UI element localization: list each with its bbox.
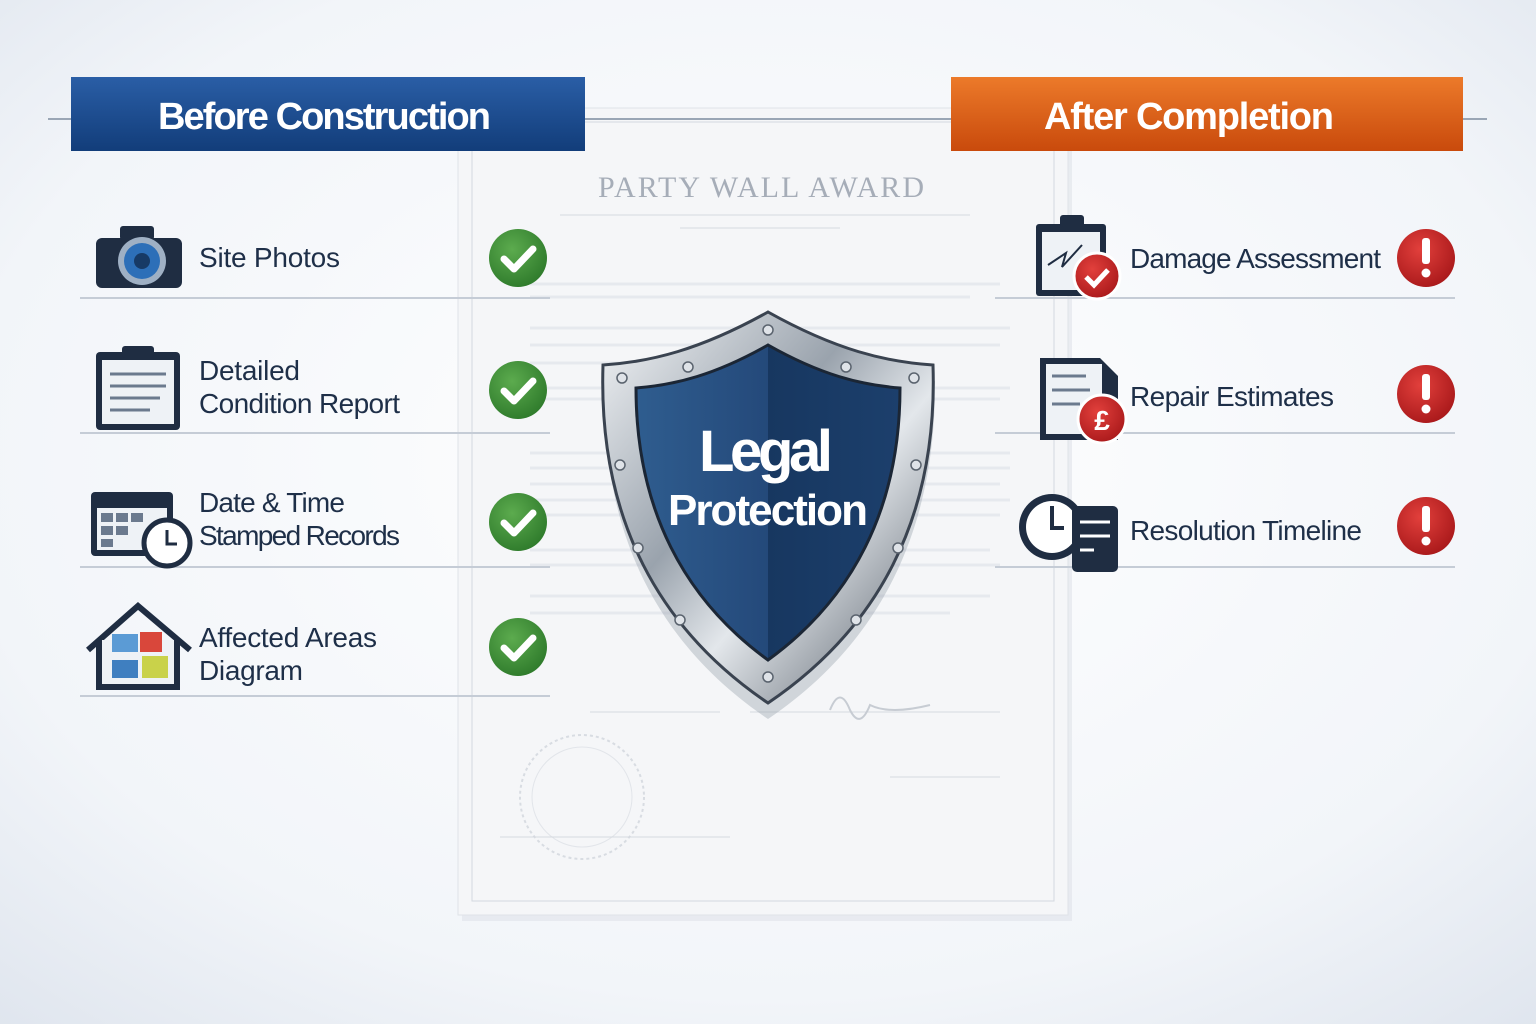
item: date & time stamped records: Date & Time (199, 487, 345, 518)
heading: After Completion (951, 77, 1463, 151)
icon: check (489, 361, 547, 419)
icon: check (489, 229, 547, 287)
shield: legal protection (603, 312, 935, 719)
item: repair estimates (1040, 358, 1455, 443)
icon: house diagram (88, 606, 190, 690)
item: detailed condition report: Condition Report (199, 388, 400, 419)
shield: legal protection: Protection (668, 486, 868, 535)
item: resolution timeline (1019, 494, 1455, 572)
icon: calendar clock (91, 492, 190, 566)
icon: check (489, 618, 547, 676)
icon: document pound: £ (1094, 405, 1110, 436)
item: affected areas diagram: Affected Areas (199, 622, 377, 653)
item: repair estimates: Repair Estimates (1130, 381, 1334, 412)
icon: clipboard damage (1036, 215, 1120, 299)
item: resolution timeline: Resolution Timeline (1130, 515, 1362, 546)
item: affected areas diagram (88, 606, 547, 690)
row separators (80, 298, 1455, 696)
heading: After Completion: After Completion (1044, 96, 1334, 138)
item: detailed condition report (96, 346, 547, 430)
icon: clock checklist (1019, 494, 1118, 572)
icon: check (489, 493, 547, 551)
item: date & time stamped records (91, 487, 547, 566)
item: damage assessment: Damage Assessment (1130, 243, 1381, 274)
icon: alert (1397, 365, 1455, 423)
icon: clipboard report (96, 346, 180, 430)
panel: after completion list (1019, 215, 1455, 572)
icon: document pound (1040, 358, 1126, 443)
icon: alert (1397, 497, 1455, 555)
item: date & time stamped records: Stamped Records (199, 520, 400, 551)
shield: legal protection: Legal (699, 419, 833, 484)
item: site photos: Site Photos (199, 242, 340, 273)
heading: Before Construction (71, 77, 585, 151)
document: party wall award (458, 108, 1072, 921)
icon: alert (1397, 229, 1455, 287)
heading: Before Construction: Before Construction (158, 96, 491, 138)
item: affected areas diagram: Diagram (199, 655, 303, 686)
item: damage assessment (1036, 215, 1455, 299)
item: site photos (96, 226, 547, 288)
document: party wall award: PARTY WALL AWARD (598, 171, 924, 204)
item: detailed condition report: Detailed (199, 355, 300, 386)
panel: before construction list (88, 226, 547, 690)
header divider line (48, 118, 1487, 120)
icon: camera (96, 226, 182, 288)
